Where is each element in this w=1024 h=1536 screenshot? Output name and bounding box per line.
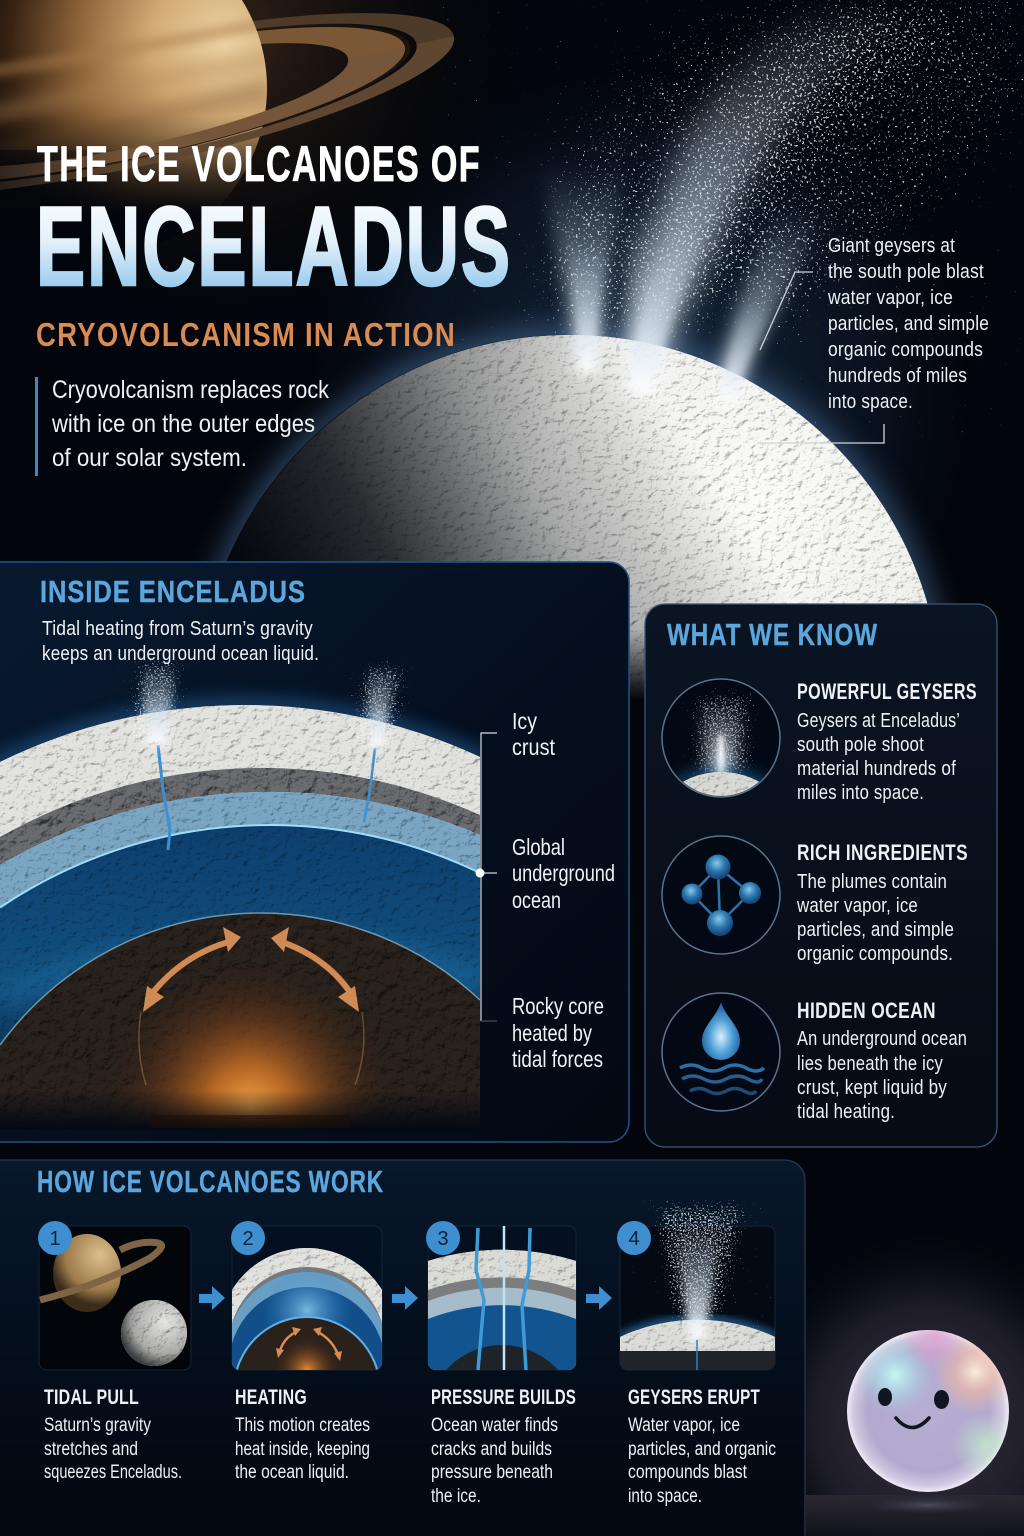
label: rocky core: Rocky core (512, 993, 604, 1019)
item text: powerful geysers: miles into space. (797, 782, 924, 804)
step text: heating (235, 1386, 370, 1483)
panel: inside Enceladus (0, 561, 630, 1143)
number badge 4 (617, 1221, 651, 1255)
number badge 2: 2 (242, 1228, 254, 1250)
item text: rich ingredients: water vapor, ice (796, 895, 918, 917)
number badge 4: 4 (628, 1228, 640, 1250)
number badge 1 (38, 1221, 72, 1255)
item text: powerful geysers: material hundreds of (797, 758, 956, 780)
step text: heating: This motion creates (235, 1415, 370, 1436)
item text: rich ingredients: The plumes contain (797, 871, 947, 893)
step text: geysers erupt: GEYSERS ERUPT (628, 1386, 760, 1409)
item: rich ingredients (662, 836, 968, 965)
intro text block (35, 376, 329, 476)
step text: geysers erupt (628, 1386, 776, 1507)
callout: geysers: the south pole blast (828, 261, 984, 283)
spray particles (540, 0, 1024, 340)
step text: geysers erupt: compounds blast (628, 1462, 748, 1483)
item text: rich ingredients (796, 840, 968, 965)
heading: what we know: WHAT WE KNOW (667, 617, 878, 652)
number badge 3 (426, 1221, 460, 1255)
step text: heating: the ocean liquid. (235, 1462, 349, 1483)
step text: pressure builds (431, 1386, 576, 1507)
step text: tidal pull (44, 1386, 182, 1483)
callout: geysers: hundreds of miles (828, 365, 967, 387)
step text: geysers erupt: into space. (628, 1486, 702, 1507)
image: cracks and pressure (428, 1226, 576, 1370)
item text: rich ingredients: particles, and simple (797, 919, 954, 941)
title: THE ICE VOLCANOES OF (37, 136, 481, 192)
crack and plume: right geyser (350, 665, 405, 822)
labels: layer bracket (476, 733, 497, 1021)
step 1: tidal pull (38, 1221, 191, 1483)
heading: how ice volcanoes work: HOW ICE VOLCANOES WORK (37, 1164, 384, 1199)
label: global underground ocean (512, 834, 615, 913)
step text: tidal pull: TIDAL PULL (44, 1386, 139, 1409)
step text: heating: heat inside, keeping (235, 1439, 370, 1460)
chart: cross-section of Enceladus layers (0, 660, 480, 1130)
label: icy crust: Icy (512, 708, 537, 734)
step text: tidal pull: stretches and (44, 1439, 138, 1460)
step text: pressure builds: Ocean water finds (431, 1415, 558, 1436)
intro text block: with ice on the outer edges (51, 410, 315, 438)
panel intro text: Tidal heating from Saturn’s gravity (42, 618, 313, 640)
intro text block: Cryovolcanism replaces rock (52, 376, 329, 404)
title (36, 136, 512, 309)
step text: tidal pull: squeezes Enceladus. (44, 1462, 182, 1483)
callout: geysers: particles, and simple (828, 313, 989, 335)
arrows: tidal flexing (139, 927, 364, 1085)
step text: pressure builds: the ice. (431, 1486, 481, 1507)
heading: inside Enceladus: INSIDE ENCELADUS (40, 574, 306, 609)
step text: pressure builds: pressure beneath (431, 1462, 553, 1483)
item text: hidden ocean: crust, kept liquid by (797, 1077, 947, 1099)
panel intro text (42, 618, 319, 665)
panel intro text: keeps an underground ocean liquid. (42, 643, 319, 665)
image: Saturn and Enceladus (39, 1226, 191, 1370)
step text: tidal pull: Saturn’s gravity (44, 1415, 151, 1436)
label: icy crust (512, 708, 556, 760)
item text: hidden ocean: HIDDEN OCEAN (797, 998, 936, 1023)
label: global underground ocean: Global (512, 834, 565, 860)
item text: hidden ocean (797, 998, 967, 1123)
crack and plume: left geyser (125, 660, 180, 850)
item text: powerful geysers: south pole shoot (797, 734, 924, 756)
number badge 1: 1 (49, 1228, 61, 1250)
step text: heating: HEATING (235, 1386, 307, 1409)
label: global underground ocean: underground (512, 860, 615, 886)
callout: geysers: Giant geysers at (828, 235, 955, 257)
icon: water drop and waves (662, 993, 780, 1111)
item text: powerful geysers (797, 679, 977, 804)
label: rocky core: tidal forces (512, 1046, 603, 1072)
image: erupting geyser (620, 1205, 775, 1370)
panel: what we know (639, 604, 997, 1147)
item text: hidden ocean: lies beneath the icy (797, 1053, 943, 1075)
illustration: geyser plumes and spray (540, 0, 1024, 402)
mascot: iridescent smiling sphere (847, 1330, 1009, 1511)
arrow: step 1 to 2 (199, 1286, 225, 1310)
step text: geysers erupt: particles, and organic (628, 1439, 776, 1460)
image: heated interior (232, 1226, 382, 1370)
subtitle: CRYOVOLCANISM IN ACTION (36, 316, 456, 353)
illustration: Saturn with rings (0, 0, 447, 260)
step 4: geysers erupt (617, 1205, 776, 1507)
icon: molecule (662, 836, 780, 954)
step text: pressure builds: PRESSURE BUILDS (431, 1386, 576, 1409)
callout: geysers: water vapor, ice (827, 287, 953, 309)
callout: geysers: organic compounds (828, 339, 983, 361)
icon: geyser (661, 678, 781, 798)
item: powerful geysers (661, 678, 976, 803)
item text: rich ingredients: organic compounds. (797, 943, 953, 965)
arrow: step 3 to 4 (586, 1286, 612, 1310)
step text: geysers erupt: Water vapor, ice (628, 1415, 740, 1436)
callout: geysers: into space. (828, 391, 913, 413)
label: rocky core (512, 993, 604, 1072)
number badge 2 (231, 1221, 265, 1255)
arrow: step 2 to 3 (392, 1286, 418, 1310)
item: hidden ocean (662, 993, 967, 1123)
step text: pressure builds: cracks and builds (431, 1439, 552, 1460)
number badge 3: 3 (437, 1228, 449, 1250)
item text: hidden ocean: An underground ocean (797, 1028, 967, 1050)
item text: rich ingredients: RICH INGREDIENTS (797, 840, 968, 865)
label: rocky core: heated by (512, 1020, 592, 1046)
label: global underground ocean: ocean (512, 887, 561, 913)
panel: how ice volcanoes work (0, 1160, 805, 1536)
callout: geysers (757, 235, 989, 443)
illustration: Enceladus moon (202, 312, 952, 696)
item text: hidden ocean: tidal heating. (797, 1101, 895, 1123)
step 3: pressure builds (426, 1221, 577, 1507)
step 2: heating (231, 1221, 382, 1482)
intro text block: of our solar system. (52, 444, 247, 472)
title: ENCELADUS (36, 184, 512, 309)
item text: powerful geysers: Geysers at Enceladus’ (797, 710, 960, 732)
label: icy crust: crust (512, 734, 556, 760)
